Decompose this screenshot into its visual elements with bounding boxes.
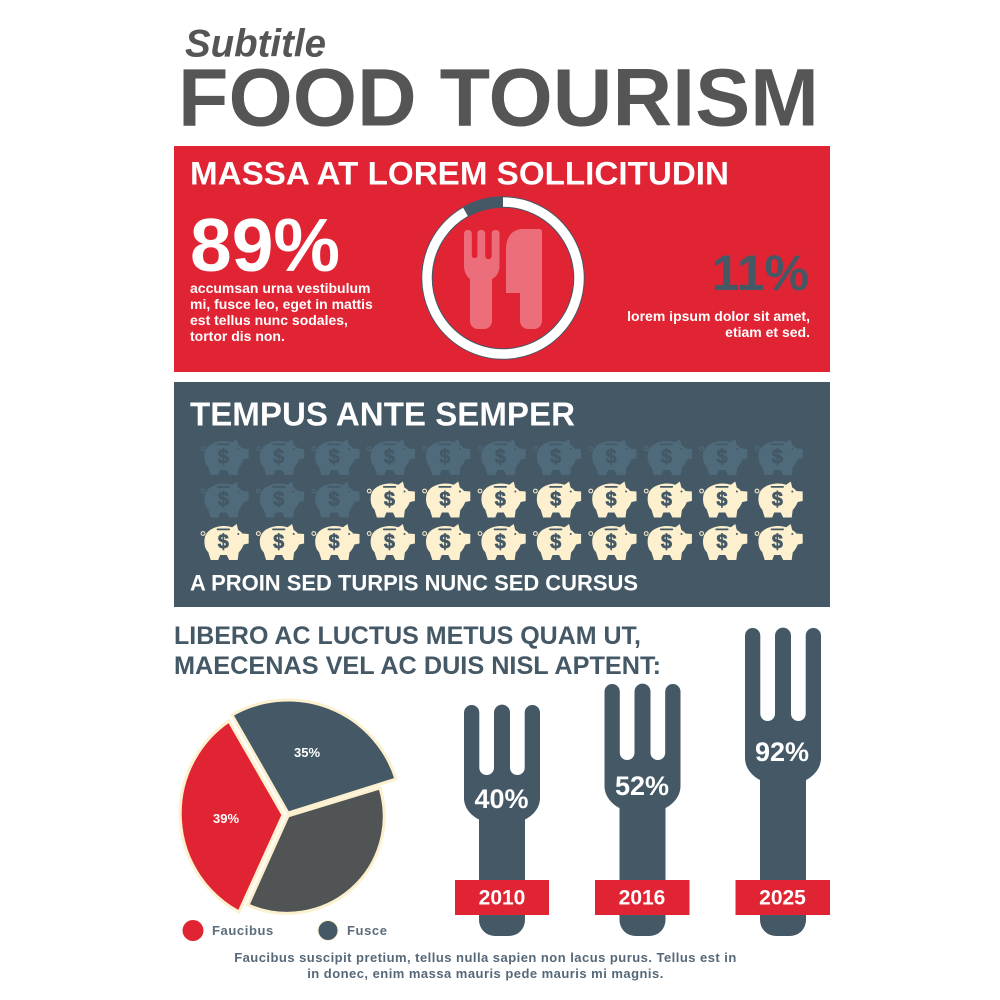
piggy row 2: $ — [439, 489, 450, 511]
piggy row 3: $ — [550, 532, 561, 554]
piggy row 1: $ — [439, 446, 450, 468]
piggy row 2: $ — [218, 489, 229, 511]
piggy row 1: $ — [772, 446, 783, 468]
piggy row 3: $ — [716, 532, 727, 554]
piggy row 1 — [201, 439, 803, 475]
year label 2016: 2016 — [619, 886, 665, 910]
icon: fork and knife — [464, 229, 542, 329]
stat description right — [627, 308, 810, 340]
piggy row 1: $ — [218, 446, 229, 468]
piggy row 3: $ — [606, 532, 617, 554]
panel: navy piggy banks — [174, 382, 830, 607]
fork bar 2016 — [595, 684, 690, 936]
year label 2025: 2025 — [759, 886, 806, 910]
stat: 11%: 11% — [712, 245, 809, 301]
footer caption: Faucibus suscipit pretium, tellus nulla sapien non lacus purus. Tellus est in — [234, 950, 737, 965]
piggy row 1: $ — [384, 446, 395, 468]
panel: red statistics — [174, 146, 830, 372]
year label 2010 — [455, 880, 549, 915]
stat description right: lorem ipsum dolor sit amet, — [627, 308, 810, 324]
piggy row 3: $ — [218, 532, 229, 554]
piggy row 3: $ — [384, 532, 395, 554]
year label 2025 — [736, 880, 830, 915]
piggy row 3: $ — [772, 532, 783, 554]
stat description right: etiam et sed. — [725, 324, 810, 340]
panel heading: MASSA AT LOREM SOLLICITUDIN — [190, 156, 729, 192]
footer caption: in donec, enim massa mauris pede mauris mi magnis. — [307, 966, 664, 981]
label 39%: 39% — [213, 811, 239, 826]
piggy row 2: $ — [661, 489, 672, 511]
piggy row 2: $ — [772, 489, 783, 511]
legend item: Faucibus: Faucibus — [212, 923, 274, 938]
piggy row 3: $ — [439, 532, 450, 554]
section heading: MAECENAS VEL AC DUIS NISL APTENT: — [174, 653, 661, 680]
piggy row 2: $ — [606, 489, 617, 511]
fork bar 2010 — [455, 705, 549, 936]
year label 2010: 2010 — [479, 886, 525, 910]
pie chart — [180, 700, 396, 913]
piggy row 2: $ — [384, 489, 395, 511]
legend item: Faucibus — [182, 920, 274, 941]
legend item: Fusce: Fusce — [347, 923, 388, 938]
title: FOOD TOURISM — [178, 52, 819, 144]
piggy row 1: $ — [716, 446, 727, 468]
piggy row 1: $ — [550, 446, 561, 468]
stat description left: accumsan urna vestibulum — [190, 280, 371, 296]
piggy row 2: $ — [495, 489, 506, 511]
piggy row 2: $ — [716, 489, 727, 511]
fork bar 2025 — [736, 628, 830, 936]
stat description left: tortor dis non. — [190, 328, 285, 344]
section heading — [174, 623, 661, 680]
stat description left — [190, 280, 373, 344]
value 52%: 52% — [615, 771, 669, 801]
value 40%: 40% — [474, 784, 529, 814]
stat description left: mi, fusce leo, eget in mattis — [190, 296, 373, 312]
slice: navy 35% — [232, 700, 396, 813]
piggy row 1: $ — [661, 446, 672, 468]
piggy row 2: $ — [273, 489, 284, 511]
panel heading: TEMPUS ANTE SEMPER — [190, 396, 575, 432]
slice: red 39% — [180, 721, 283, 912]
value 92%: 92% — [755, 737, 809, 767]
section heading: LIBERO AC LUCTUS METUS QUAM UT, — [174, 623, 641, 650]
stat description left: est tellus nunc sodales, — [190, 312, 348, 328]
footer caption — [234, 950, 737, 981]
piggy row 3: $ — [495, 532, 506, 554]
slice: grey — [248, 788, 384, 913]
piggy row 3: $ — [273, 532, 284, 554]
piggy row 1: $ — [329, 446, 340, 468]
donut ring 89 / 11 — [427, 202, 579, 354]
stat: 89%: 89% — [190, 203, 340, 287]
panel caption: A PROIN SED TURPIS NUNC SED CURSUS — [190, 570, 638, 596]
piggy row 1: $ — [273, 446, 284, 468]
piggy row 2 — [201, 482, 803, 518]
piggy row 2: $ — [329, 489, 340, 511]
piggy row 2: $ — [550, 489, 561, 511]
piggy row 3: $ — [329, 532, 340, 554]
legend — [182, 920, 388, 941]
legend item: Fusce — [318, 920, 388, 940]
piggy row 1: $ — [495, 446, 506, 468]
piggy row 1: $ — [606, 446, 617, 468]
piggy row 3: $ — [661, 532, 672, 554]
piggy row 3 — [201, 524, 803, 560]
label 35%: 35% — [294, 745, 320, 760]
subtitle: Subtitle — [185, 23, 326, 66]
year label 2016 — [595, 880, 690, 915]
